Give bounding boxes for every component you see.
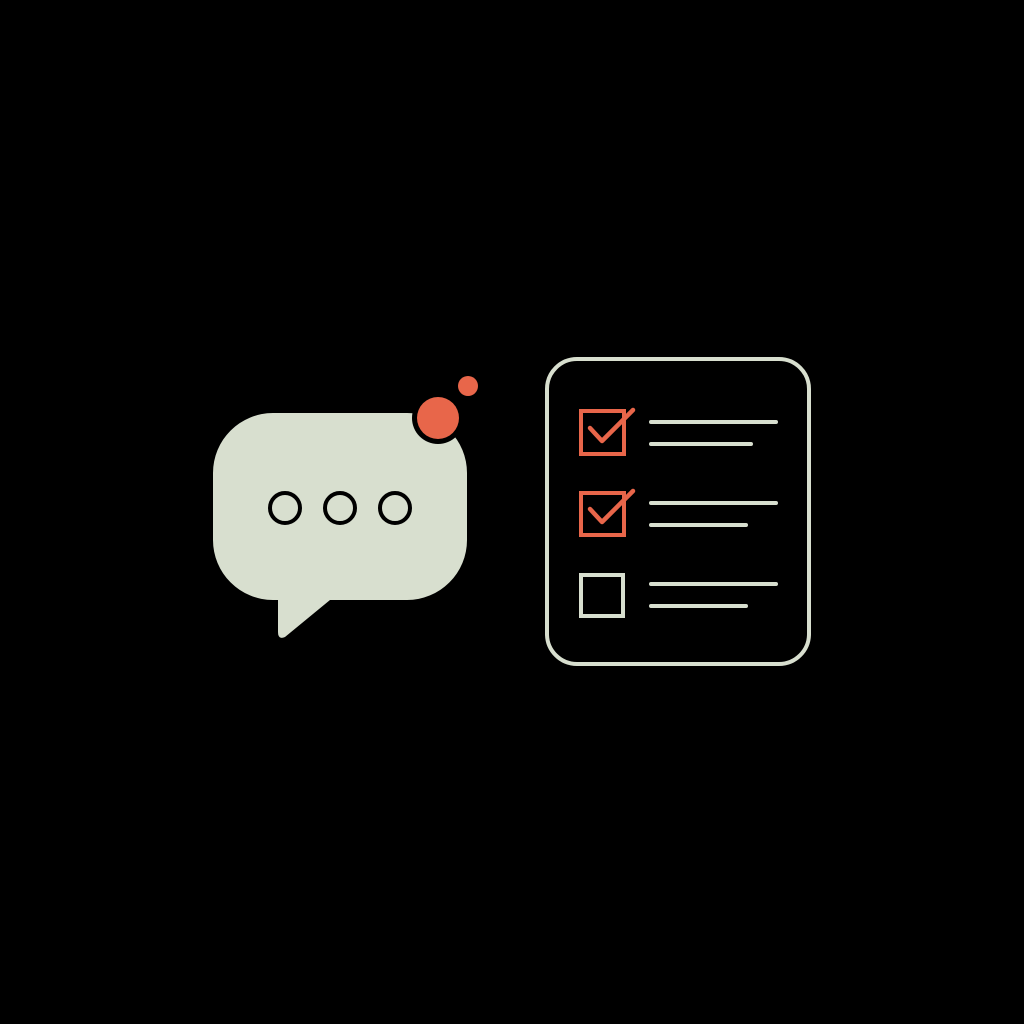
icon: notification dots — [412, 376, 478, 444]
icon: speech bubble — [213, 413, 467, 638]
item 2 checked — [581, 491, 776, 535]
item 3 unchecked — [581, 575, 776, 616]
icon: checklist — [547, 359, 809, 664]
item 1 checked — [581, 410, 776, 454]
